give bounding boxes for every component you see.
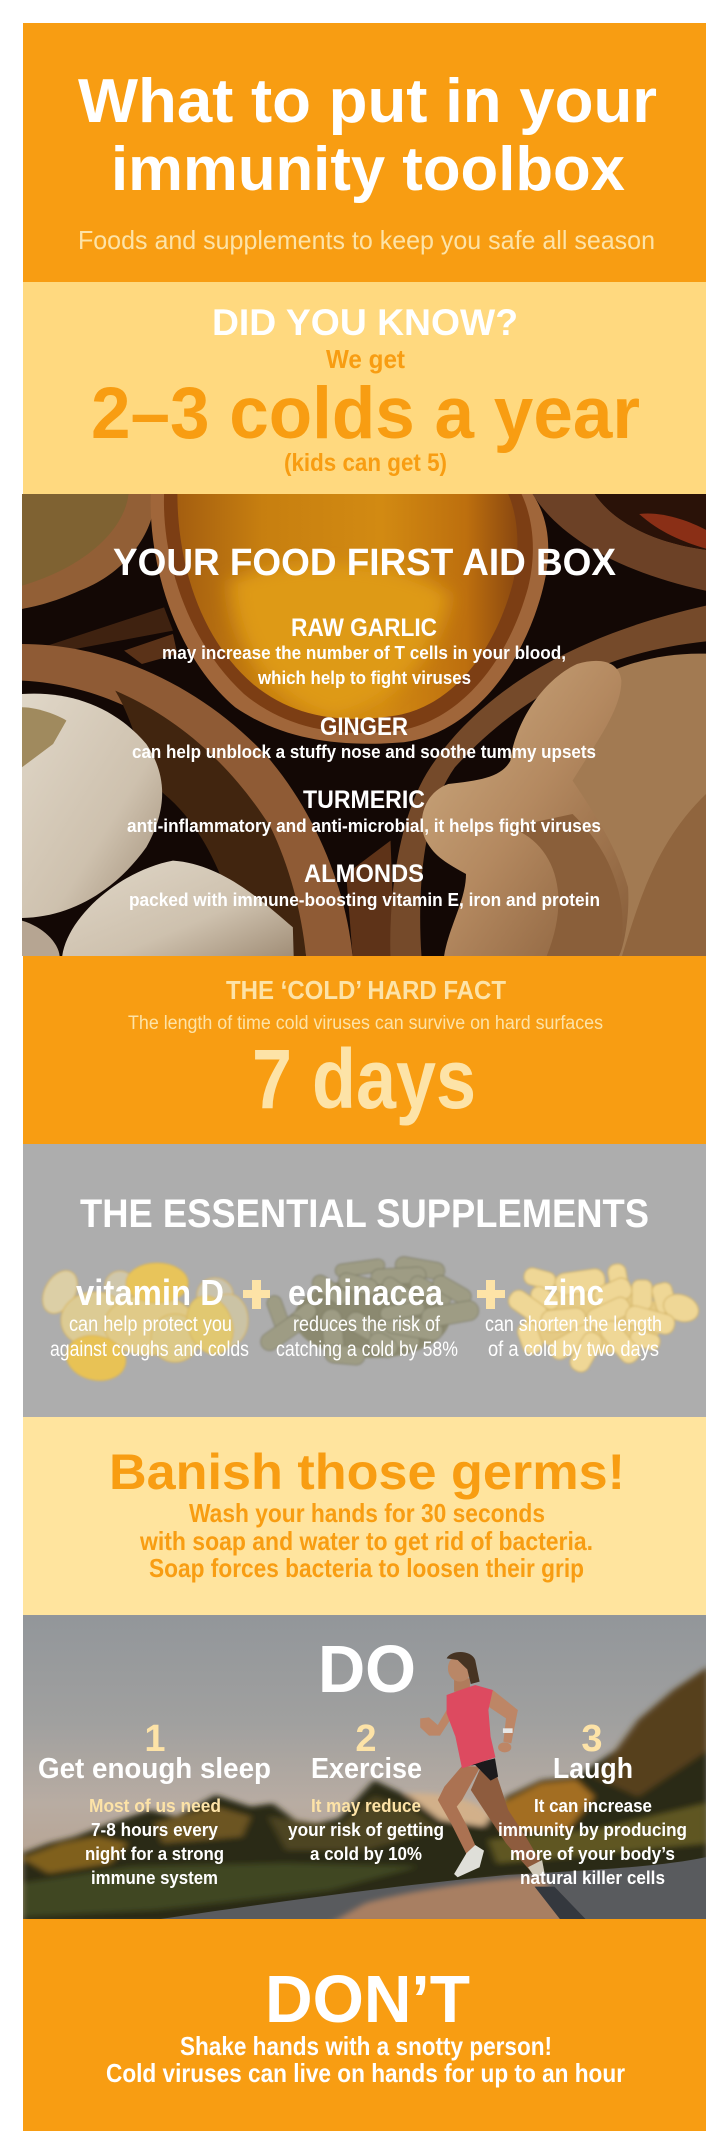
heading: food first aid box: YOUR FOOD FIRST AID BOX [113, 542, 617, 584]
item: almonds: packed with immune-boosting vitamin E, iron and protein [129, 890, 600, 910]
tip 3: laugh: It can increase [534, 1796, 652, 1816]
heading: essential supplements: THE ESSENTIAL SUPPLEMENTS [80, 1192, 649, 1236]
item: ginger: GINGER [320, 713, 408, 741]
item: raw garlic: RAW GARLIC [291, 614, 437, 642]
tip 3: laugh [498, 1718, 687, 1888]
item: turmeric [127, 786, 601, 836]
heading: don't: DON’T [265, 1962, 470, 2037]
text: wash your hands: Soap forces bacteria to loosen their grip [149, 1553, 584, 1583]
panel: essential supplements [23, 1144, 706, 1417]
tip 2: exercise: a cold by 10% [310, 1844, 422, 1864]
tip 1: sleep: Most of us need [89, 1796, 221, 1816]
tip 1: sleep: Get enough sleep [38, 1753, 271, 1785]
item: echinacea [276, 1272, 458, 1361]
tip 1: sleep: night for a strong [85, 1844, 224, 1864]
tip 3: laugh: immunity by producing [498, 1820, 687, 1840]
photo: runner at sunset [22, 1615, 708, 1923]
tip 2: exercise: It may reduce [311, 1796, 421, 1816]
text: wash your hands [139, 1498, 593, 1583]
panel: food first aid box [22, 494, 713, 958]
heading: do: DO [318, 1632, 416, 1707]
panel: don't [23, 1919, 706, 2131]
item: vitamin D: can help protect you [69, 1313, 232, 1336]
item: raw garlic: may increase the number of T cells in your blood, [162, 643, 566, 663]
item: turmeric: TURMERIC [303, 786, 425, 814]
item: echinacea: echinacea [288, 1272, 444, 1313]
panel: do [22, 1615, 708, 1923]
tip 1: sleep: immune system [91, 1868, 218, 1888]
tip 2: exercise: 2 [355, 1718, 377, 1760]
item: zinc: of a cold by two days [488, 1338, 659, 1361]
panel: cold hard fact [23, 956, 706, 1144]
text: kids can get 5: (kids can get 5) [284, 449, 447, 477]
text: shake hands: Shake hands with a snotty person! [180, 2031, 552, 2061]
item: echinacea: catching a cold by 58% [276, 1338, 458, 1361]
tip 3: laugh: more of your body’s [510, 1844, 675, 1864]
item: vitamin D: against coughs and colds [50, 1338, 249, 1361]
icon: plus [243, 1280, 270, 1309]
stat: colds a year: 2–3 colds a year [91, 373, 640, 454]
pills: zinc tablets [505, 1263, 702, 1375]
item: turmeric: anti-inflammatory and anti-microbial, it helps fight viruses [127, 816, 601, 836]
tip 2: exercise: your risk of getting [288, 1820, 444, 1840]
icon: plus [477, 1280, 505, 1309]
tip 1: sleep: 7-8 hours every [91, 1820, 218, 1840]
tip 1: sleep: 1 [144, 1718, 166, 1760]
subtitle: Foods and supplements to keep you safe all season [78, 225, 655, 255]
item: almonds [129, 860, 600, 910]
item: raw garlic: which help to fight viruses [257, 668, 471, 688]
stat: 7 days: 7 days [252, 1032, 476, 1126]
text: wash your hands: with soap and water to get rid of bacteria. [139, 1526, 593, 1556]
tip 2: exercise [288, 1718, 444, 1864]
item: echinacea: reduces the risk of [293, 1313, 440, 1336]
panel: header [23, 23, 706, 282]
panel: banish those germs [23, 1417, 706, 1615]
title: What to put in your [78, 67, 657, 136]
pills: vitamin D capsules [36, 1263, 248, 1386]
title: immunity toolbox [111, 135, 626, 204]
panel: did you know [23, 282, 706, 494]
heading: did you know: DID YOU KNOW? [212, 302, 518, 343]
item: almonds: ALMONDS [304, 860, 424, 888]
item: vitamin D [50, 1272, 249, 1361]
tip 2: exercise: Exercise [311, 1753, 422, 1785]
photo: spices, garlic and ginger [22, 494, 713, 958]
item: zinc [485, 1272, 662, 1361]
text: shake hands: Cold viruses can live on hands for up to an hour [106, 2058, 625, 2088]
title [78, 67, 657, 204]
figure: runner [420, 1652, 545, 1877]
text: wash your hands: Wash your hands for 30 seconds [189, 1498, 545, 1528]
tip 1: sleep [38, 1718, 271, 1888]
item: ginger: can help unblock a stuffy nose and soothe tummy upsets [132, 742, 596, 762]
text: we get: We get [326, 344, 405, 374]
heading: cold hard fact: THE ‘COLD’ HARD FACT [226, 975, 506, 1005]
item: zinc: zinc [543, 1272, 604, 1313]
tip 3: laugh: 3 [581, 1718, 603, 1760]
item: ginger [132, 713, 596, 762]
text: shake hands [106, 2031, 625, 2088]
item: zinc: can shorten the length [485, 1313, 662, 1336]
tip 3: laugh: Laugh [553, 1753, 633, 1785]
tip 3: laugh: natural killer cells [520, 1868, 665, 1888]
text: length of time: The length of time cold viruses can survive on hard surfaces [128, 1013, 603, 1034]
item: vitamin D: vitamin D [76, 1272, 224, 1313]
pills: echinacea capsules [257, 1255, 480, 1366]
heading: banish those germs: Banish those germs! [109, 1444, 625, 1500]
item: raw garlic [162, 614, 566, 688]
